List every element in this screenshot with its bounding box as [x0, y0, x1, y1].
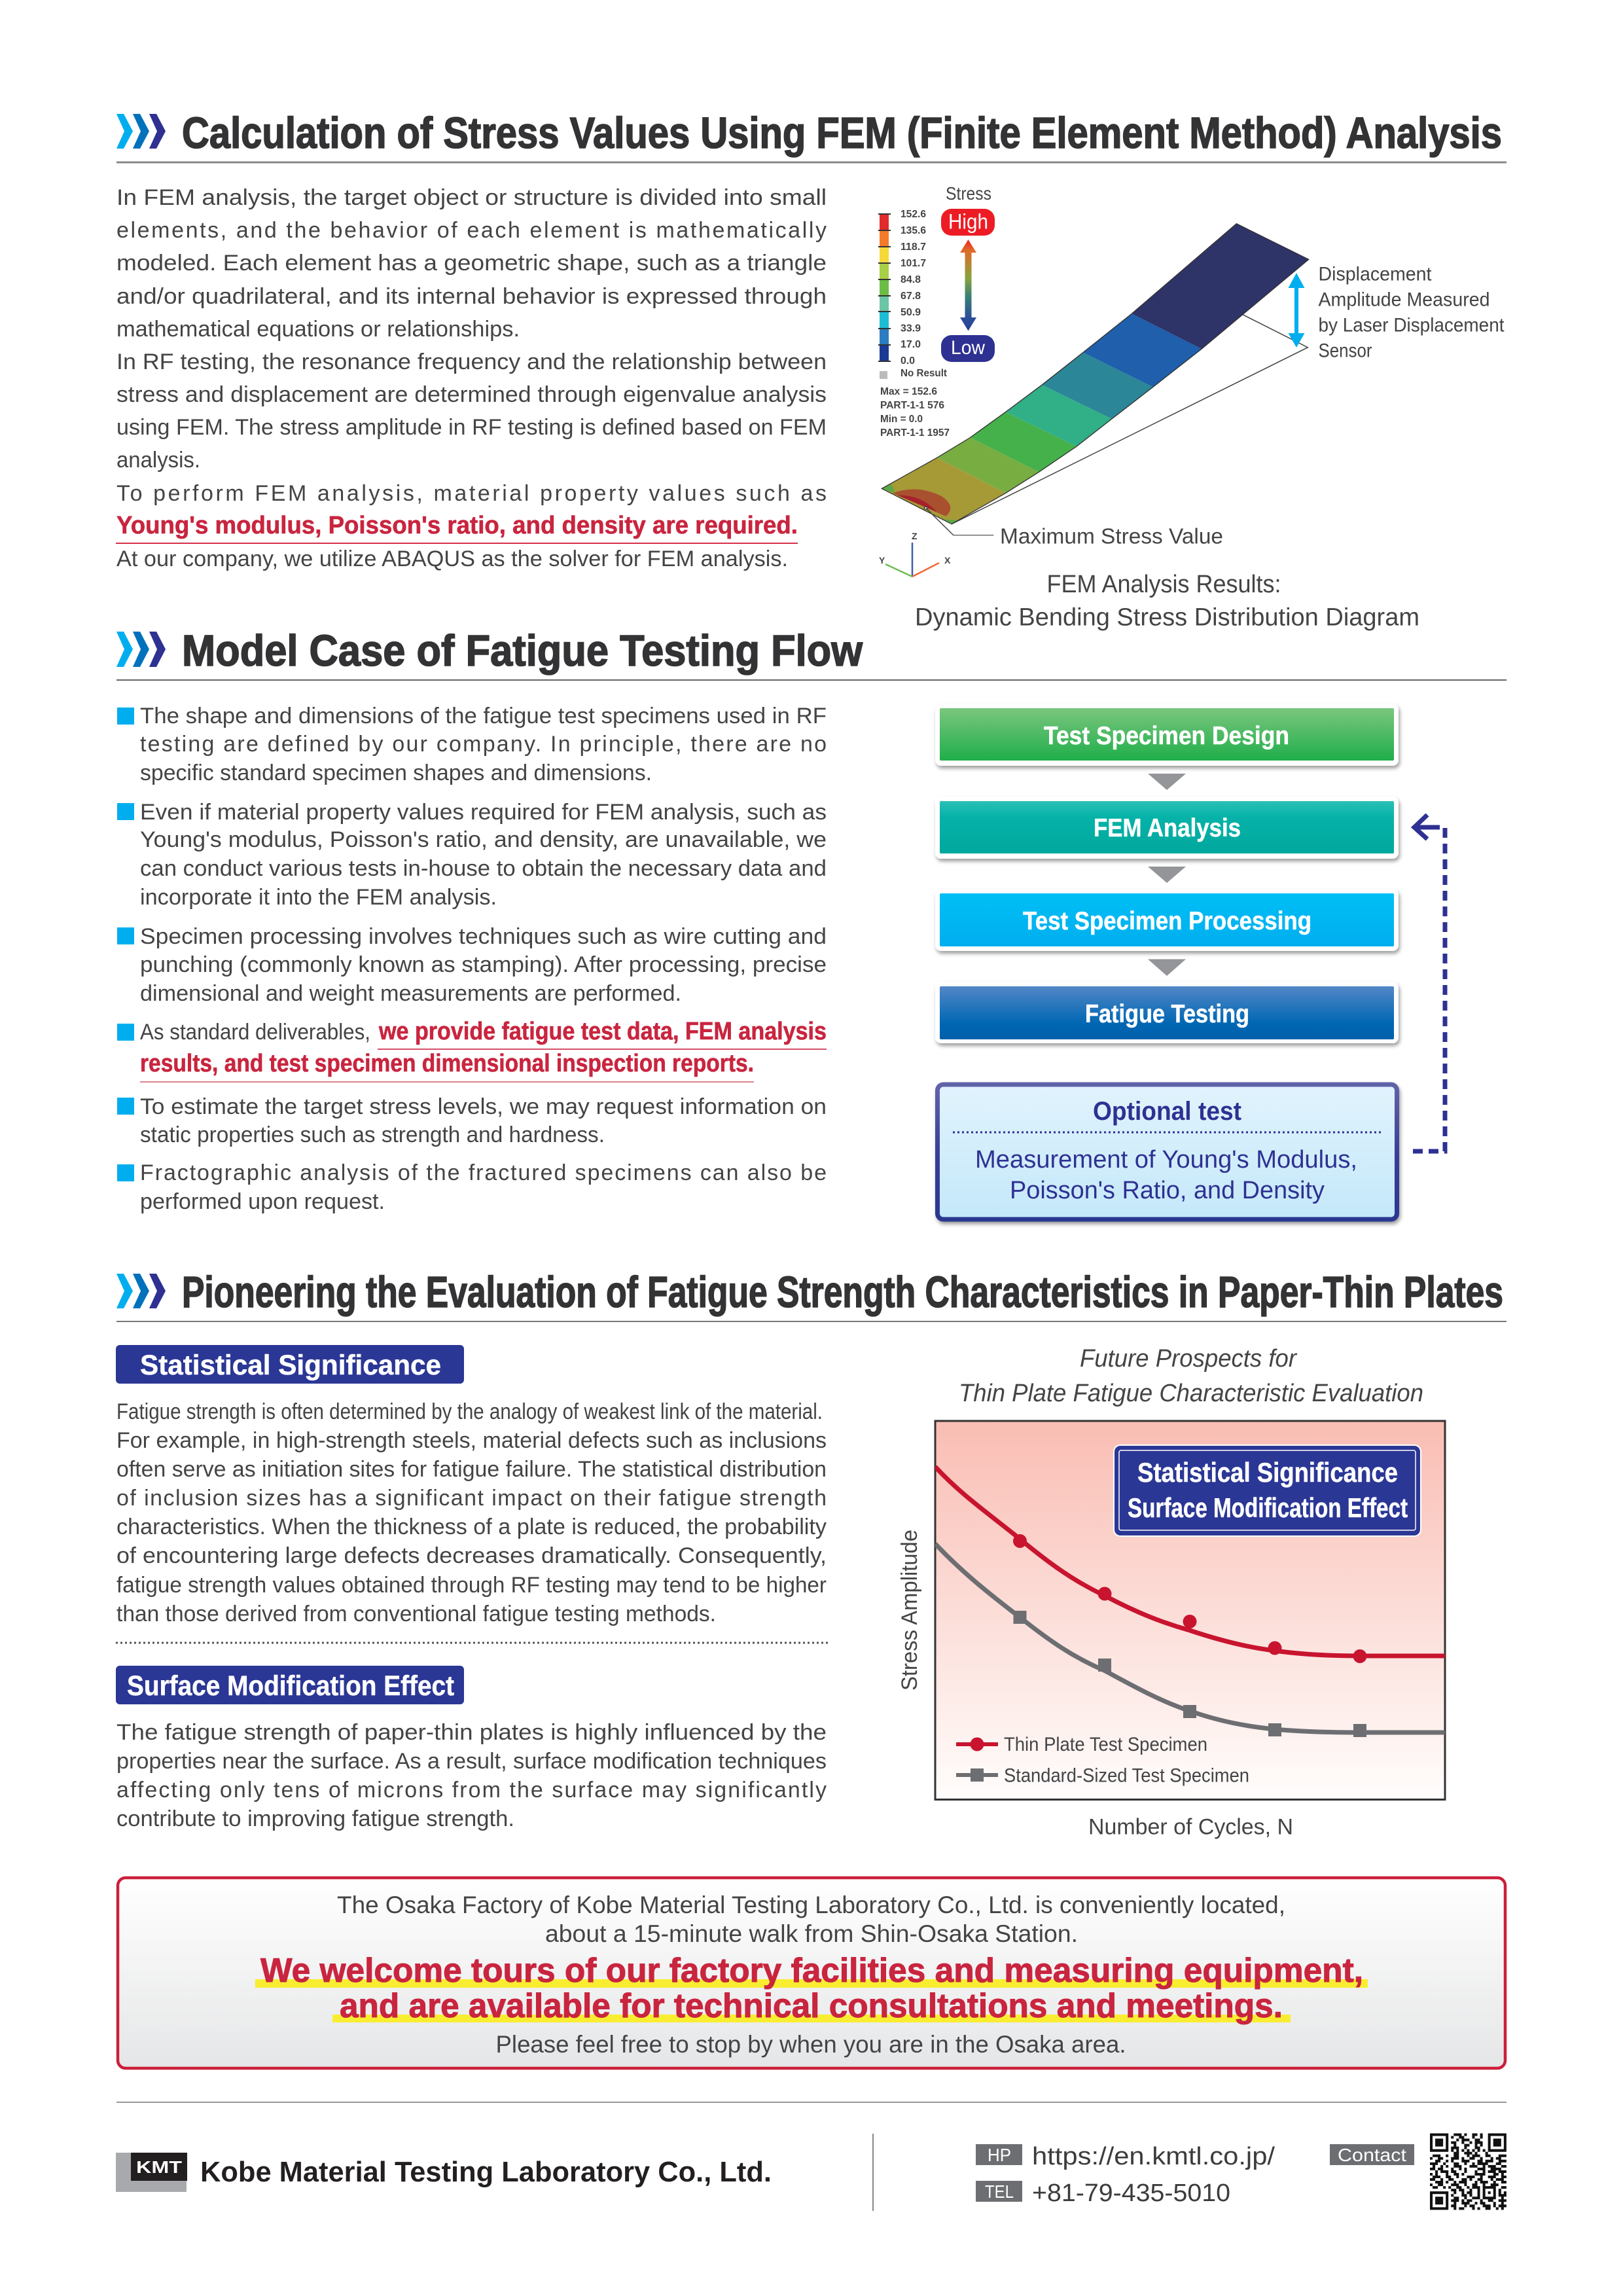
label: displacement amplitude: Amplitude Measured — [1318, 289, 1489, 310]
panel: statistical significance: of encountering large defects decreases dramatically. Consequently, — [116, 1543, 827, 1568]
arrow: down — [1148, 867, 1186, 883]
step: FEM analysis — [935, 797, 1399, 859]
stress high to low indicator — [941, 183, 995, 362]
bullet: fractographic analysis — [117, 1160, 827, 1214]
series: thin plate test specimen — [935, 1467, 1445, 1663]
icon: triple chevron — [116, 632, 166, 667]
stress high to low indicator: High — [948, 209, 988, 233]
text block: FEM analysis explanation — [116, 185, 827, 571]
caption: FEM analysis results: FEM Analysis Results: — [1047, 571, 1281, 598]
label: displacement amplitude: by Laser Displacement — [1318, 314, 1505, 336]
badge: statistical significance and surface modification: Statistical Significance — [1137, 1457, 1398, 1488]
chart title: Thin Plate Fatigue Characteristic Evaluation — [959, 1380, 1423, 1407]
chart title — [959, 1345, 1423, 1407]
badge: statistical significance and surface modification: Surface Modification Effect — [1128, 1492, 1408, 1523]
callout: factory tours: We welcome tours of our factory facilities and measuring equipment, — [260, 1952, 1363, 1990]
icon: contact QR code — [1430, 2134, 1507, 2210]
icon: xyz axes: Y — [879, 555, 885, 565]
colour scale bar: Min = 0.0 — [880, 414, 923, 425]
label: displacement amplitude — [1318, 263, 1505, 361]
icon: xyz axes — [879, 531, 951, 577]
bullet: specimen shape: The shape and dimensions of the fatigue test specimens used in RF — [140, 704, 827, 728]
colour scale bar: 118.7 — [901, 242, 926, 253]
colour scale bar: 33.9 — [901, 323, 921, 334]
panel: statistical significance: often serve as initiation sites for fatigue failure. The statistical distribution — [116, 1457, 827, 1482]
text block: FEM analysis explanation: In RF testing, the resonance frequency and the relationship between — [116, 350, 827, 374]
stress high to low indicator: Low — [951, 337, 985, 359]
optional test box: Measurement of Young's Modulus, — [975, 1146, 1357, 1174]
colour scale bar: 67.8 — [901, 291, 921, 302]
footer: contact badge: Contact — [1338, 2145, 1406, 2165]
badge: statistical significance and surface modification — [1114, 1445, 1421, 1536]
colour scale bar: 135.6 — [901, 225, 926, 236]
text block: FEM analysis explanation: Young's modulus, Poisson's ratio, and density are required. — [116, 512, 798, 539]
bullet: specimen processing — [117, 924, 827, 1006]
bullet: specimen shape — [117, 704, 827, 785]
step: test specimen processing: Test Specimen Processing — [1023, 907, 1311, 935]
colour scale bar: 84.8 — [901, 274, 921, 285]
chart: FEM stress distribution diagram — [878, 183, 1505, 631]
icon: xyz axes: Z — [912, 531, 918, 541]
footer: telephone: +81-79-435-5010 — [1032, 2179, 1230, 2207]
footer: company logo and name: Kobe Material Testing Laboratory Co., Ltd. — [200, 2156, 772, 2188]
colour scale bar: 101.7 — [901, 258, 926, 269]
callout: factory tours: about a 15-minute walk from Shin-Osaka Station. — [545, 1920, 1078, 1947]
label: maximum stress value: Maximum Stress Value — [1000, 524, 1223, 548]
step: test specimen design: Test Specimen Design — [1044, 722, 1289, 750]
callout: factory tours — [118, 1878, 1505, 2068]
panel: surface modification effect: contribute to improving fatigue strength. — [116, 1806, 514, 1831]
panel: statistical significance: fatigue strength values obtained through RF testing may tend to be higher — [116, 1573, 827, 1598]
logo: KMT — [136, 2157, 182, 2177]
legend: Standard-Sized Test Specimen — [1004, 1765, 1249, 1787]
bullet: specimen shape: specific standard specimen shapes and dimensions. — [140, 761, 652, 785]
arrow: down — [1148, 774, 1186, 790]
panel: statistical significance: Fatigue strength is often determined by the analogy of weakest link of the material. — [116, 1399, 823, 1424]
stress high to low indicator: Stress — [946, 183, 991, 204]
arrow: optional test back to FEM analysis — [1413, 815, 1445, 1151]
icon: triple chevron — [116, 114, 166, 149]
label: displacement amplitude: Displacement — [1318, 263, 1432, 285]
series: standard-sized test specimen — [935, 1544, 1445, 1737]
text block: FEM analysis explanation: stress and displacement are determined through eigenvalue analysis — [116, 382, 827, 407]
panel: statistical significance: of inclusion sizes has a significant impact on their fatigue strength — [116, 1486, 827, 1511]
bullet: target stress levels: To estimate the target stress levels, we may request information on — [140, 1094, 827, 1119]
step: test specimen processing — [935, 889, 1399, 951]
footer: website: HP — [988, 2145, 1011, 2165]
bullet: target stress levels — [117, 1094, 827, 1147]
arrow: displacement amplitude — [1288, 273, 1305, 348]
bullet: standard deliverables: As standard deliverables, — [140, 1020, 370, 1045]
caption: FEM analysis results — [915, 571, 1419, 631]
callout: factory tours: Please feel free to stop by when you are in the Osaka area. — [496, 2031, 1126, 2058]
colour scale bar: 0.0 — [901, 355, 915, 367]
footer: telephone: TEL — [985, 2181, 1014, 2202]
optional test box — [937, 1085, 1397, 1219]
bullet: fractographic analysis: Fractographic analysis of the fractured specimens can also be — [140, 1160, 827, 1185]
footer: website: https://en.kmtl.co.jp/ — [1032, 2143, 1275, 2170]
flow chart: fatigue testing steps — [935, 704, 1445, 1219]
legend: Thin Plate Test Specimen — [1004, 1734, 1207, 1755]
bullet: specimen processing: Specimen processing involves techniques such as wire cutting and — [140, 924, 827, 949]
bullet: specimen shape: testing are defined by our company. In principle, there are no — [140, 732, 827, 757]
heading: model case of fatigue testing flow: Model Case of Fatigue Testing Flow — [182, 626, 863, 675]
label: displacement amplitude: Sensor — [1318, 340, 1372, 361]
bullet: material properties — [117, 800, 827, 910]
bullet: standard deliverables — [117, 1018, 827, 1083]
bullet: material properties: incorporate it into the FEM analysis. — [140, 885, 497, 910]
step: fatigue testing: Fatigue Testing — [1085, 1000, 1249, 1028]
bullet list: fatigue test notes — [117, 704, 827, 1214]
bullet: standard deliverables: we provide fatigue test data, FEM analysis — [378, 1018, 827, 1045]
panel: statistical significance — [116, 1345, 827, 1626]
logo — [116, 2153, 187, 2192]
plot area — [935, 1421, 1445, 1800]
colour scale bar: Max = 152.6 — [880, 386, 937, 397]
y axis label: Stress Amplitude — [897, 1530, 922, 1691]
text block: FEM analysis explanation: elements, and the behavior of each element is mathematically — [116, 218, 827, 243]
bullet: material properties: Young's modulus, Poisson's ratio, and density, are unavailable, we — [140, 827, 827, 852]
x axis label: Number of Cycles, N — [1088, 1814, 1293, 1839]
legend — [956, 1734, 1249, 1787]
colour scale bar: PART-1-1 576 — [880, 400, 944, 411]
colour scale bar — [878, 209, 950, 439]
text block: FEM analysis explanation: and/or quadrilateral, and its internal behavior is expressed through — [116, 284, 827, 309]
arrow: down — [1148, 960, 1186, 976]
bullet: standard deliverables: results, and test specimen dimensional inspection reports. — [140, 1050, 754, 1077]
bullet: fractographic analysis: performed upon request. — [140, 1189, 385, 1214]
colour scale bar: 50.9 — [901, 307, 921, 318]
text block: FEM analysis explanation: using FEM. The stress amplitude in RF testing is defined based on FEM — [116, 415, 827, 440]
panel: surface modification effect: The fatigue strength of paper-thin plates is highly influenced by the — [116, 1720, 827, 1745]
step: test specimen design — [935, 704, 1399, 766]
bullet: material properties: can conduct various tests in-house to obtain the necessary data and — [140, 856, 827, 881]
subheading badge: Surface Modification Effect — [127, 1670, 454, 1702]
infographic page — [116, 114, 1507, 2211]
chart title: Future Prospects for — [1080, 1345, 1297, 1372]
text block: FEM analysis explanation: To perform FEM analysis, material property values such as — [116, 481, 827, 506]
callout: factory tours: The Osaka Factory of Kobe Material Testing Laboratory Co., Ltd. is conveniently located, — [337, 1892, 1285, 1918]
callout: factory tours: and are available for technical consultations and meetings. — [340, 1987, 1283, 2025]
bullet: specimen processing: punching (commonly known as stamping). After processing, precise — [140, 952, 827, 977]
colour scale bar: PART-1-1 1957 — [880, 427, 950, 439]
text block: FEM analysis explanation: In FEM analysis, the target object or structure is divided into small — [116, 185, 827, 210]
caption: FEM analysis results: Dynamic Bending Stress Distribution Diagram — [915, 603, 1419, 631]
panel: statistical significance: than those derived from conventional fatigue testing methods. — [116, 1602, 716, 1626]
panel: surface modification effect — [116, 1666, 827, 1831]
optional test box: Poisson's Ratio, and Density — [1010, 1177, 1325, 1204]
chart: future prospects S-N curves — [897, 1345, 1445, 1839]
optional test box: Optional test — [1093, 1097, 1241, 1126]
bullet: material properties: Even if material property values required for FEM analysis, such as — [140, 800, 827, 825]
icon: xyz axes: X — [944, 555, 951, 565]
icon: triple chevron — [116, 1274, 166, 1308]
beam contour plot — [882, 224, 1309, 535]
panel: surface modification effect: affecting only tens of microns from the surface may significantly — [116, 1778, 827, 1803]
text block: FEM analysis explanation: At our company, we utilize ABAQUS as the solver for FEM analysis. — [116, 547, 788, 571]
bullet: target stress levels: static properties such as strength and hardness. — [140, 1122, 605, 1147]
colour scale bar: No Result — [901, 368, 948, 379]
colour scale bar: 152.6 — [901, 209, 926, 220]
panel: statistical significance: For example, in high-strength steels, material defects such as inclusions — [116, 1428, 827, 1453]
step: fatigue testing — [935, 982, 1399, 1043]
colour scale bar: 17.0 — [901, 339, 921, 350]
subheading badge: Statistical Significance — [140, 1350, 441, 1381]
heading: model case of fatigue testing flow — [116, 626, 1507, 681]
panel: statistical significance: characteristics. When the thickness of a plate is reduced, the probability — [116, 1515, 827, 1539]
step: FEM analysis: FEM Analysis — [1094, 814, 1241, 842]
text block: FEM analysis explanation: mathematical equations or relationships. — [116, 317, 520, 342]
bullet: specimen processing: dimensional and weight measurements are performed. — [140, 981, 681, 1006]
text block: FEM analysis explanation: analysis. — [116, 448, 200, 473]
text block: FEM analysis explanation: modeled. Each element has a geometric shape, such as a triangle — [116, 251, 827, 276]
panel: surface modification effect: properties near the surface. As a result, surface modification techniques — [116, 1749, 827, 1774]
